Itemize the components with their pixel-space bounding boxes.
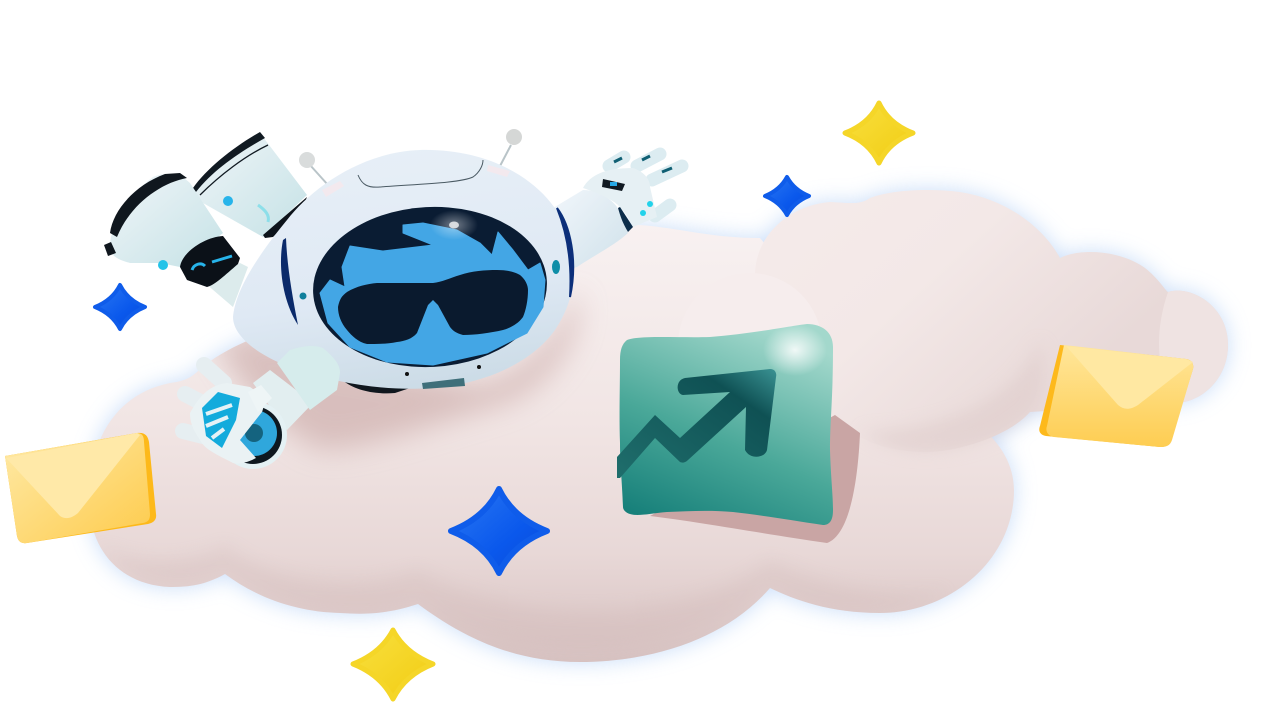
robot face <box>320 223 545 365</box>
robot head <box>233 150 574 389</box>
icon: envelope right <box>1039 345 1193 447</box>
icon: envelope left <box>5 433 156 543</box>
robot neck <box>340 362 410 393</box>
robot right arm <box>553 154 682 270</box>
icon: gold star top <box>845 103 913 163</box>
robot upper boot <box>193 132 307 238</box>
antenna right <box>500 129 522 166</box>
icon: small blue star left <box>95 285 145 329</box>
robot shoulder <box>277 346 340 410</box>
antenna left <box>299 152 328 185</box>
shadow of chart icon <box>650 415 860 543</box>
head shadow on cloud <box>215 290 579 450</box>
icon: gold star bottom <box>353 630 433 699</box>
robot sunglasses <box>338 270 528 344</box>
icon: small blue star top <box>765 177 809 215</box>
icon: large blue star <box>451 489 547 573</box>
robot <box>104 129 682 469</box>
lower cloud <box>89 225 1014 662</box>
icon: rising arrow <box>617 369 776 478</box>
cloud glow <box>89 190 1228 662</box>
robot lower boot <box>104 173 248 307</box>
robot left arm and hand <box>183 365 313 469</box>
upper cloud <box>678 190 1228 452</box>
icon: teal chart pillow <box>617 324 833 525</box>
robot visor <box>309 201 551 373</box>
